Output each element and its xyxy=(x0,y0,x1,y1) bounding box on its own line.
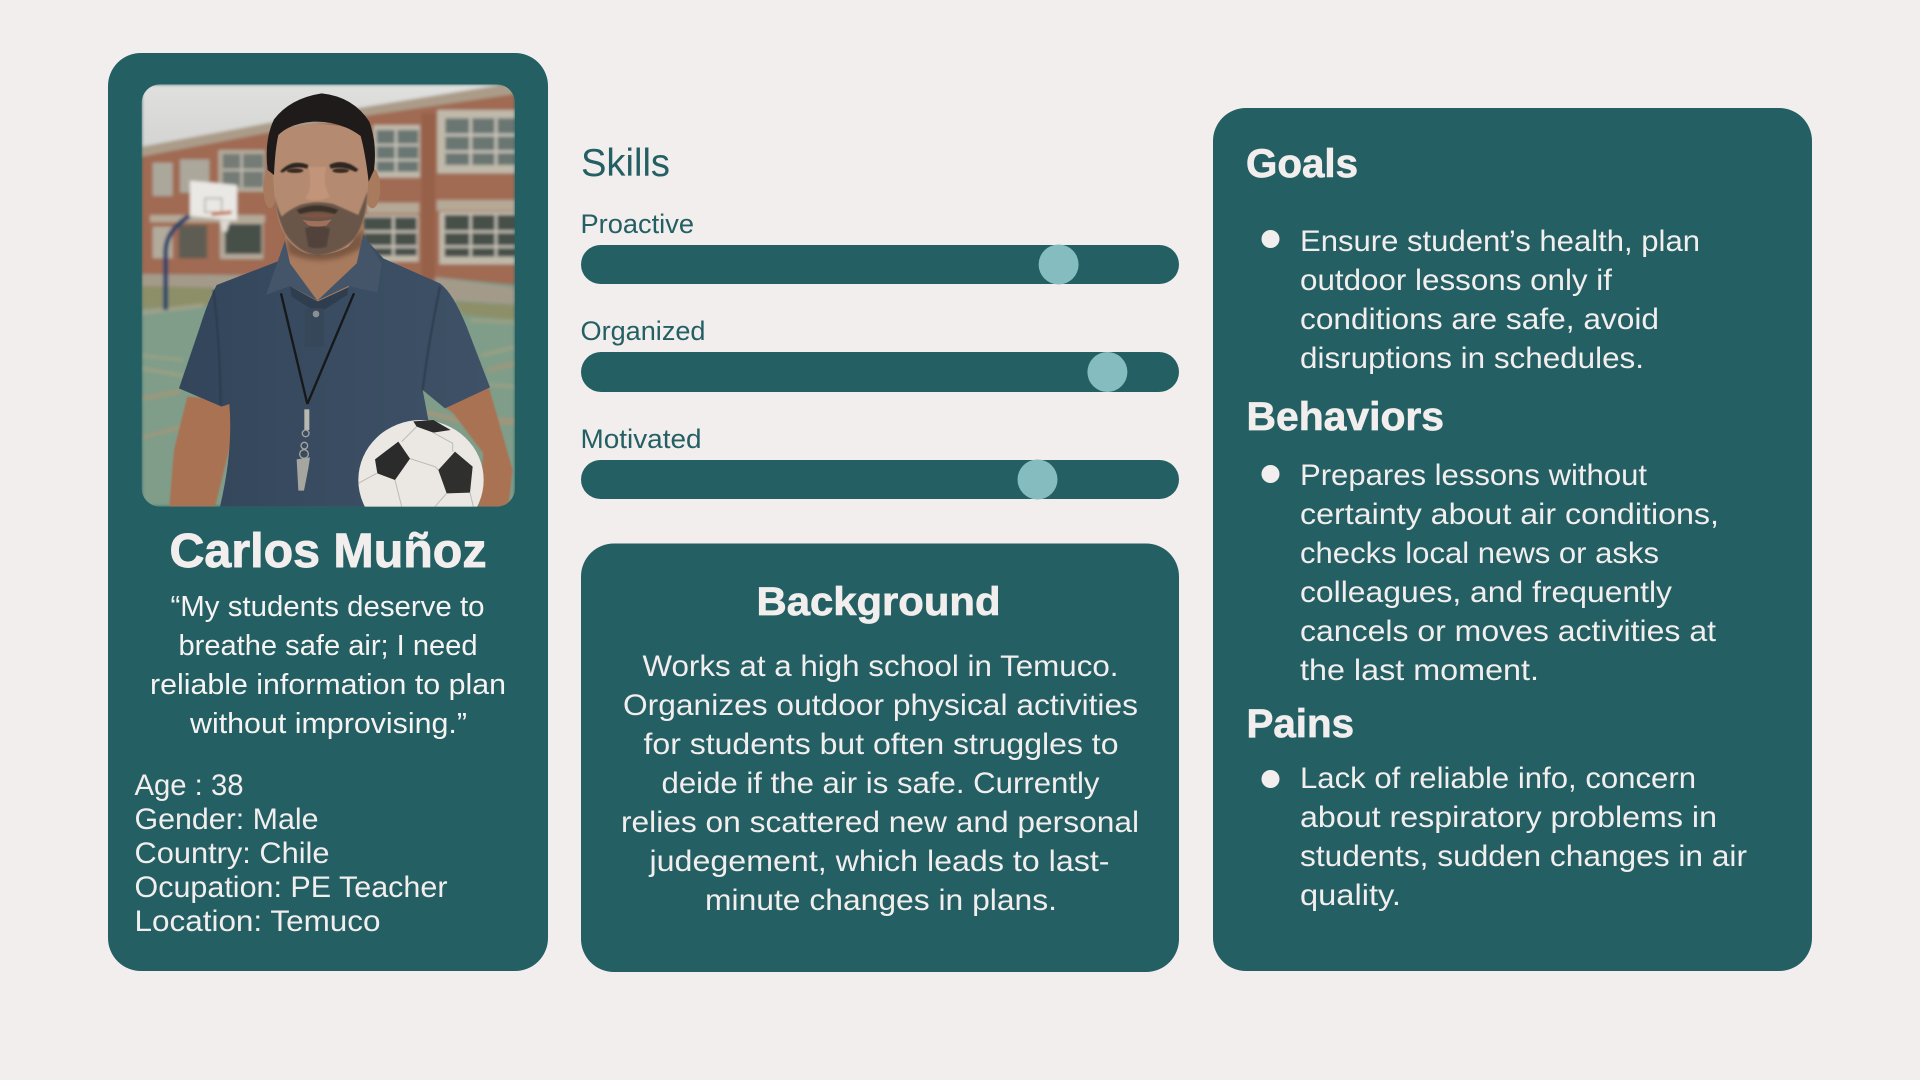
photo: teacher holding a soccer ball xyxy=(142,84,515,540)
background paragraph: Organizes outdoor physical activities xyxy=(623,689,1138,722)
background heading: Background xyxy=(756,580,1000,624)
demographics: Ocupation: PE Teacher xyxy=(134,871,448,904)
goals heading: Goals xyxy=(1246,142,1358,186)
pains text: Lack of reliable info, concern xyxy=(1300,762,1696,795)
panel: background xyxy=(581,544,1179,972)
background paragraph: deide if the air is safe. Currently xyxy=(662,767,1100,800)
background paragraph: minute changes in plans. xyxy=(705,884,1057,917)
quote: “My students deserve to xyxy=(170,591,485,623)
behaviors text: the last moment. xyxy=(1300,654,1539,687)
goals text: conditions are safe, avoid xyxy=(1300,303,1659,336)
skill: organized: Organized xyxy=(580,316,706,346)
goals bullet xyxy=(1262,230,1280,248)
pains text xyxy=(1300,762,1747,912)
behaviors text: checks local news or asks xyxy=(1300,537,1659,570)
background paragraph xyxy=(621,650,1139,917)
skill: motivated xyxy=(580,424,1179,500)
goals text: Ensure student’s health, plan xyxy=(1300,225,1700,258)
goals text: outdoor lessons only if xyxy=(1300,264,1613,297)
profile card background xyxy=(108,53,548,971)
behaviors text: Prepares lessons without xyxy=(1300,459,1648,492)
skill: proactive: Proactive xyxy=(580,209,694,239)
behaviors text: certainty about air conditions, xyxy=(1300,498,1719,531)
panel: goals, behaviors, pains xyxy=(1213,108,1812,971)
panel: profile card xyxy=(108,53,548,971)
skill: organized xyxy=(580,316,1179,392)
skills heading: Skills xyxy=(581,142,670,185)
behaviors text: colleagues, and frequently xyxy=(1300,576,1672,609)
quote: breathe safe air; I need xyxy=(178,630,478,662)
background card xyxy=(581,544,1179,972)
name: Carlos Muñoz xyxy=(170,525,486,578)
background paragraph: for students but often struggles to xyxy=(644,728,1118,761)
background paragraph: Works at a high school in Temuco. xyxy=(642,650,1118,683)
behaviors text: cancels or moves activities at xyxy=(1300,615,1717,648)
skill: motivated: Motivated xyxy=(580,424,702,454)
right card xyxy=(1213,108,1812,971)
behaviors bullet xyxy=(1262,465,1280,483)
background paragraph: judegement, which leads to last- xyxy=(648,845,1110,878)
behaviors heading: Behaviors xyxy=(1246,395,1444,439)
skill: proactive xyxy=(580,209,1179,284)
demographics: Country: Chile xyxy=(134,837,330,870)
goals text: disruptions in schedules. xyxy=(1300,342,1644,375)
pains text: quality. xyxy=(1300,879,1401,912)
quote: without improvising.” xyxy=(189,708,467,740)
quote: reliable information to plan xyxy=(150,669,506,701)
pains text: students, sudden changes in air xyxy=(1300,840,1747,873)
goals text xyxy=(1300,225,1700,375)
panel: skills xyxy=(580,142,1179,500)
demographics: Gender: Male xyxy=(134,803,318,836)
background paragraph: relies on scattered new and personal xyxy=(621,806,1139,839)
demographics xyxy=(134,769,448,938)
pains text: about respiratory problems in xyxy=(1300,801,1717,834)
demographics: Location: Temuco xyxy=(134,905,380,938)
pains heading: Pains xyxy=(1246,702,1354,746)
behaviors text xyxy=(1300,459,1719,687)
demographics: Age : 38 xyxy=(134,769,244,802)
quote xyxy=(150,591,506,740)
pains bullet xyxy=(1262,770,1280,788)
